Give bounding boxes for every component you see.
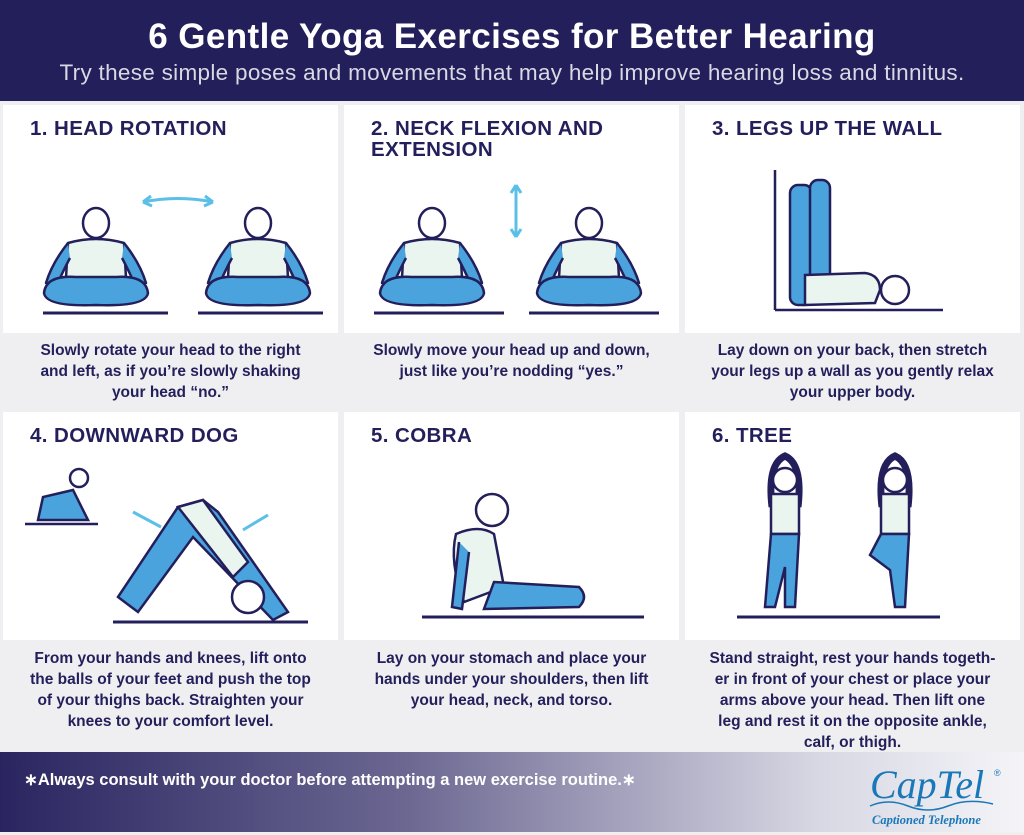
text: legs up wall: Lay down on your back, then stretch <box>718 342 987 359</box>
panel: downward dog <box>3 412 338 640</box>
logo: CapTel: ® <box>994 768 1001 778</box>
illustration: tree <box>737 452 940 618</box>
text: head rotation <box>40 342 301 401</box>
text: cobra <box>375 650 648 709</box>
illustration: legs up wall <box>774 170 943 312</box>
subtitle: Try these simple poses and movements that may help improve hearing loss and tinnitus. <box>59 60 965 85</box>
text: downward dog <box>30 650 311 730</box>
text: downward dog: the balls of your feet and push the top <box>30 671 311 688</box>
panel: neck flexion <box>344 105 679 333</box>
text: head rotation: and left, as if you’re slowly shaking <box>40 363 301 380</box>
text: downward dog: of your thighs back. Straighten your <box>37 692 304 709</box>
panel: head rotation <box>3 105 338 333</box>
title: 6 Gentle Yoga Exercises for Better Hearing <box>148 17 876 56</box>
heading: 1: 1. HEAD ROTATION <box>30 117 227 140</box>
text: tree: calf, or thigh. <box>804 734 901 751</box>
text: neck flexion <box>373 342 650 380</box>
text: tree: er in front of your chest or place your <box>715 671 990 688</box>
panel: tree <box>685 412 1020 640</box>
text: tree: arms above your head. Then lift one <box>720 692 985 709</box>
illustration: head rotation <box>42 194 323 314</box>
text: downward dog: From your hands and knees, lift onto <box>34 650 307 667</box>
heading: 6: 6. TREE <box>712 424 792 447</box>
text: head rotation: your head “no.” <box>112 384 229 401</box>
text: head rotation: Slowly rotate your head to the right <box>40 342 301 359</box>
text: legs up wall: your legs up a wall as you gently relax <box>711 363 994 380</box>
header <box>0 0 1024 101</box>
logo: CapTel <box>870 762 1001 827</box>
heading: 2: 2. NECK FLEXION AND <box>371 117 603 140</box>
heading: 2 <box>371 117 603 161</box>
footer <box>0 752 1024 832</box>
illustration: cobra <box>422 492 644 618</box>
panel: legs up the wall <box>685 105 1020 333</box>
text: legs up wall: your upper body. <box>790 384 915 401</box>
text: neck flexion: Slowly move your head up and down, <box>373 342 650 359</box>
heading: 2: EXTENSION <box>371 138 493 161</box>
heading: 5: 5. COBRA <box>371 424 472 447</box>
text: tree: Stand straight, rest your hands togeth- <box>710 650 995 667</box>
logo: CapTel: Captioned Telephone <box>872 813 981 827</box>
text: neck flexion: just like you’re nodding “yes.” <box>400 363 623 380</box>
text: tree: leg and rest it on the opposite ankle, <box>718 713 987 730</box>
heading: 4: 4. DOWNWARD DOG <box>30 424 239 447</box>
text: tree <box>710 650 995 751</box>
text: cobra: Lay on your stomach and place your <box>377 650 646 667</box>
footer note: ∗Always consult with your doctor before attempting a new exercise routine.∗ <box>24 771 636 789</box>
text: cobra: your head, neck, and torso. <box>411 692 612 709</box>
illustration: downward dog <box>25 468 308 624</box>
illustration: neck flexion <box>374 184 659 314</box>
text: cobra: hands under your shoulders, then lift <box>375 671 648 688</box>
text: legs up wall <box>711 342 994 401</box>
logo: CapTel: CapTel <box>870 762 984 807</box>
text: downward dog: knees to your comfort level. <box>68 713 273 730</box>
panel: cobra <box>344 412 679 640</box>
heading: 3: 3. LEGS UP THE WALL <box>712 117 942 140</box>
